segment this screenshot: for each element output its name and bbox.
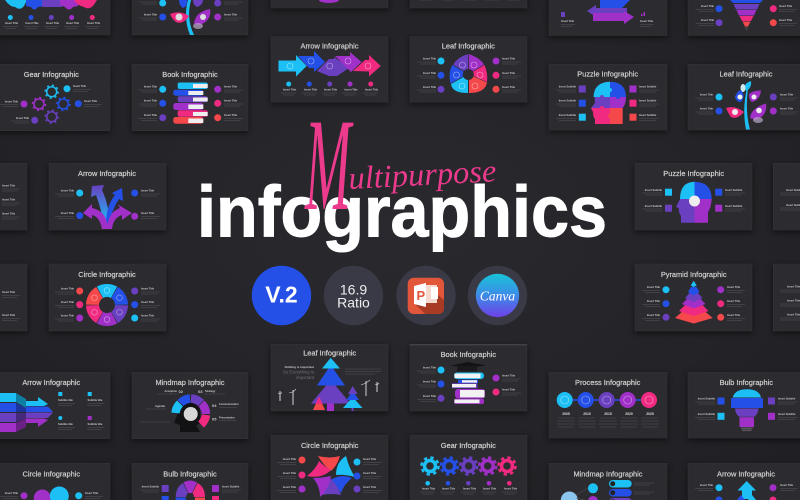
labels [138, 84, 243, 121]
labels: Insert Title [5, 21, 19, 25]
panel: Arrow Infographic [271, 37, 388, 102]
labels: Insert Subtitle [639, 84, 657, 88]
labels: Insert Subtitle [698, 396, 716, 400]
labels: Insert Title [780, 106, 794, 110]
heading: Leaf Infographic [719, 70, 773, 78]
labels: Insert Title [61, 211, 75, 215]
labels: Insert Title [640, 19, 654, 23]
panel: Book Infographic [132, 64, 248, 131]
main title: infographics: infographics [197, 173, 607, 253]
labels: Insert Title [700, 106, 714, 110]
labels: Insert Title [647, 285, 661, 289]
panel: plant top [132, 0, 248, 35]
labels: Insert Title [422, 486, 436, 490]
panel: left edge lower [0, 264, 27, 331]
labels: Strategy [205, 389, 216, 393]
panel: Leaf Infographic plant [688, 64, 800, 130]
labels: Agenda [155, 404, 165, 408]
labels: Insert Subtitle [559, 113, 577, 117]
trees [311, 358, 362, 411]
body lines [557, 418, 659, 427]
labels: Insert Title [442, 486, 456, 490]
labels: Acception [164, 389, 177, 393]
heading: Mindmap Infographic [573, 470, 643, 478]
detail blocks: Subtitle title [58, 422, 73, 426]
panel: top centre right [410, 0, 527, 8]
up arrows [737, 481, 756, 500]
labels [695, 396, 798, 420]
labels: Communication [219, 402, 239, 406]
labels: Insert Title [141, 314, 155, 318]
labels: Insert Title [363, 471, 377, 475]
labels: Insert Title [779, 4, 793, 8]
years: 2005 [562, 412, 570, 416]
arrow chain [278, 51, 381, 76]
heading: Arrow Infographic [78, 169, 136, 178]
puzzle head [676, 182, 712, 223]
panel: Circle Infographic star [271, 435, 388, 500]
badge: PowerPoint [396, 266, 456, 325]
badge: Canva: Canva [480, 288, 515, 304]
heading: Leaf Infographic [303, 348, 357, 358]
merged arrows [0, 393, 53, 432]
labels: Insert Subtitle [698, 412, 716, 416]
labels: Insert Title [700, 483, 714, 487]
labels: Insert Title [423, 380, 437, 384]
labels [140, 484, 241, 500]
labels: Insert Title [304, 88, 318, 92]
labels [417, 56, 521, 93]
labels: Insert Title [61, 188, 75, 192]
process timeline [557, 392, 657, 408]
panel: Circle Infographic bottom [0, 463, 110, 500]
heading: Circle Infographic [23, 470, 80, 478]
labels [695, 92, 798, 114]
labels: Insert Title [5, 100, 19, 104]
labels [277, 456, 382, 492]
funnel chart [730, 0, 763, 31]
panel: left edge upper: Insert Title [2, 184, 16, 188]
panel: Bulb Infographic bottom [132, 463, 248, 500]
panel: Circle Infographic [49, 264, 166, 331]
badge: 16.9 ratio: Ratio [337, 294, 370, 310]
labels: Insert Title [144, 12, 158, 16]
script title: Multipurpose [304, 91, 497, 238]
labels: 05 [212, 416, 217, 422]
bulb ring [176, 480, 205, 500]
labels: Insert Title [423, 394, 437, 398]
labels: Insert Title [727, 313, 741, 317]
heading: Pyramid Infographic [661, 270, 727, 279]
labels [55, 286, 160, 322]
labels: Insert Subtitle [639, 98, 657, 102]
panel: Arrow Infographic branching [49, 163, 166, 230]
labels: 03 [198, 389, 203, 394]
labels [281, 82, 379, 95]
panel: left edge lower: Insert Title [2, 290, 16, 294]
panel: left edge lower: Insert Title [2, 313, 16, 317]
labels: Insert Subtitle [645, 188, 663, 192]
heading: Circle Infographic [301, 441, 359, 450]
labels: Insert Title [727, 299, 741, 303]
branching arrows [83, 185, 132, 229]
heading: Arrow Infographic [22, 378, 81, 387]
labels: Insert Title [423, 366, 437, 370]
ring chart [87, 285, 127, 325]
labels: Insert Title [283, 88, 297, 92]
labels: Insert Title [87, 21, 101, 25]
labels: 04 [212, 403, 217, 408]
labels [556, 84, 659, 121]
labels: Insert Title [5, 491, 19, 495]
panel: Leaf Infographic trees [271, 344, 388, 411]
heading: Bulb Infographic [163, 470, 217, 478]
labels [417, 366, 521, 402]
detail blocks: Subtitle title [58, 398, 73, 402]
labels: Insert Title [502, 71, 516, 75]
panel: right edge upper [773, 163, 800, 230]
labels: Insert Subtitle [778, 412, 796, 416]
heading: Arrow Infographic [717, 470, 775, 478]
pill list [609, 480, 654, 500]
labels: Insert Title [423, 85, 437, 89]
years: 2020 [625, 412, 633, 416]
labels: Insert Title [365, 88, 379, 92]
labels: Insert Title [463, 486, 477, 490]
circles [34, 486, 69, 500]
heading: Book Infographic [441, 350, 496, 359]
pyramid chart [675, 281, 713, 324]
labels: Insert Subtitle [778, 396, 796, 400]
labels: Insert Title [283, 485, 297, 489]
panel: right edge lower [773, 264, 800, 331]
badge: V.2 [252, 266, 311, 325]
labels: Insert Title [701, 4, 715, 8]
script title: Multipurpose: ultipurpose [347, 152, 497, 196]
labels: Insert Title [502, 374, 516, 378]
labels [561, 19, 654, 26]
panel: Mindmap Infographic bottom [549, 463, 667, 500]
panel: Arrow Infographic stripes [0, 372, 110, 439]
labels [696, 4, 797, 26]
labels [0, 84, 102, 124]
labels [140, 389, 239, 422]
badge: 16.9 ratio [324, 266, 383, 325]
book stack [173, 82, 208, 124]
labels: Presentation [219, 416, 235, 420]
heading: Mindmap Infographic [155, 378, 225, 387]
labels: Insert Title [61, 300, 75, 304]
panel: Gear Infographic [0, 64, 110, 131]
detail blocks [58, 392, 104, 430]
labels: Insert Title [363, 485, 377, 489]
panel: Gear Infographic row [410, 435, 527, 500]
panel: left edge upper: Insert Title [2, 198, 16, 202]
heading: Circle Infographic [78, 270, 136, 279]
labels: Insert Title [344, 88, 358, 92]
heading: Puzzle Infographic [663, 169, 724, 178]
panel: Arrow Infographic bottom [688, 463, 800, 500]
labels: Insert Subtitle [559, 98, 577, 102]
labels: Insert Title [84, 99, 98, 103]
heading: Arrow Infographic [301, 42, 359, 50]
labels: Insert Title [780, 92, 794, 96]
labels: Insert Title [144, 98, 158, 102]
labels: Insert Title [561, 19, 575, 23]
heading: Process Infographic [575, 378, 641, 387]
years: 2010 [583, 412, 591, 416]
labels: Insert Title [423, 56, 437, 60]
heading: Puzzle Infographic [577, 70, 638, 78]
puzzle pieces strip [5, 0, 97, 10]
mindmap nodes [561, 483, 598, 500]
script title: Multipurpose: M [304, 91, 354, 238]
gear cluster [32, 85, 70, 123]
years: 2025 [646, 412, 654, 416]
panel: puzzle top left [0, 0, 110, 35]
panel: Puzzle Infographic two [635, 163, 752, 230]
labels: Insert Title [700, 92, 714, 96]
labels: Insert Title [141, 188, 155, 192]
star petals [307, 456, 355, 497]
panel: left edge upper: Insert Title [2, 212, 16, 216]
labels: Insert Title [780, 483, 794, 487]
labels: Insert Subtitle [559, 84, 577, 88]
labels: Insert Title [66, 21, 80, 25]
text block: important [296, 375, 315, 380]
labels: Insert Title [224, 98, 238, 102]
arrows [561, 0, 645, 24]
labels [642, 285, 745, 321]
labels: Insert Title [224, 84, 238, 88]
labels: Insert Title [46, 21, 60, 25]
detail blocks: Subtitle title [88, 398, 103, 402]
labels: Insert Subtitle [639, 113, 657, 117]
labels: Insert Title [16, 116, 30, 120]
years: 2015 [604, 412, 612, 416]
leaf segments [450, 54, 487, 93]
panel: Pyramid Infographic [635, 264, 752, 331]
labels: Insert Title [727, 285, 741, 289]
labels [642, 188, 745, 212]
labels: Insert Title [502, 56, 516, 60]
labels: Insert Title [701, 18, 715, 22]
labels: Insert Title [283, 471, 297, 475]
plant diagram [726, 81, 766, 130]
panel: right edge lower: Insert Title [787, 298, 800, 302]
labels: Insert Title [483, 486, 497, 490]
panel: right edge lower: Insert Title [787, 284, 800, 288]
labels: Insert Title [224, 113, 238, 117]
labels: Insert Title [26, 21, 39, 25]
wind turbines [278, 380, 379, 405]
labels: Insert Title [144, 113, 158, 117]
labels: Insert Title [141, 211, 155, 215]
panel: Book Infographic stack [410, 344, 527, 411]
panel: Process Infographic [549, 372, 667, 438]
text block: So Everything is [283, 370, 314, 374]
labels: Insert Title [502, 388, 516, 392]
heading: Leaf Infographic [442, 42, 495, 50]
labels: Insert Title [363, 457, 377, 461]
labels: 02 [178, 389, 184, 394]
heading: Bulb Infographic [720, 378, 773, 387]
labels: Insert Title [85, 491, 99, 495]
labels: Insert Subtitle [222, 484, 240, 488]
panel: Bulb Infographic [688, 372, 800, 438]
labels: Insert Title [224, 12, 238, 16]
heading: Gear Infographic [441, 441, 496, 450]
labels: Insert Title [283, 457, 297, 461]
labels: Insert Title [144, 84, 158, 88]
puzzle head [591, 82, 626, 124]
labels: Insert Title [647, 299, 661, 303]
badge: Canva [468, 266, 527, 325]
detail blocks: Subtitle title [88, 422, 103, 426]
plant diagram [170, 0, 210, 35]
panel: funnel top [688, 0, 800, 36]
labels: Insert Title [324, 88, 338, 92]
labels: Insert Title [61, 314, 75, 318]
labels [695, 483, 798, 500]
labels: Insert Subtitle [142, 484, 160, 488]
text block [283, 365, 315, 380]
panel: Puzzle Infographic [549, 64, 667, 130]
labels: Insert Subtitle [725, 188, 743, 192]
text block: Nothing is important [285, 365, 314, 369]
heading: Book Infographic [162, 70, 218, 79]
bulb chart [731, 389, 763, 431]
heading: Gear Infographic [24, 70, 79, 79]
panel: top centre left [271, 0, 388, 8]
panel: right edge lower: Insert Title [787, 312, 800, 316]
labels [3, 15, 101, 28]
labels: Insert Title [141, 300, 155, 304]
labels: Insert Title [141, 286, 155, 290]
labels: Insert Subtitle [645, 204, 663, 208]
labels: Insert Title [779, 18, 793, 22]
labels: Insert Title [502, 85, 516, 89]
labels [55, 188, 160, 220]
labels [139, 0, 242, 20]
labels [420, 481, 518, 494]
body lines [345, 369, 381, 374]
labels: Insert Title [73, 84, 87, 88]
gears row [422, 458, 516, 474]
labels: Insert Title [423, 71, 437, 75]
labels: Insert Title [61, 286, 75, 290]
panel: Leaf Infographic [410, 37, 527, 102]
panel: Mindmap Infographic [132, 372, 248, 439]
badge: 16.9 ratio: 16.9 [340, 281, 367, 297]
labels: Insert Title [504, 486, 518, 490]
labels: Insert Subtitle [725, 204, 743, 208]
labels [0, 491, 103, 499]
labels: Insert Title [647, 313, 661, 317]
panel: left edge upper [0, 163, 27, 230]
mindmap ring [174, 398, 206, 432]
years [562, 412, 654, 416]
badge: PowerPoint: P [416, 288, 426, 303]
panel: arrow exchange top [549, 0, 667, 36]
badge: V.2: V.2 [265, 282, 298, 308]
graduation cap and books [451, 362, 486, 404]
